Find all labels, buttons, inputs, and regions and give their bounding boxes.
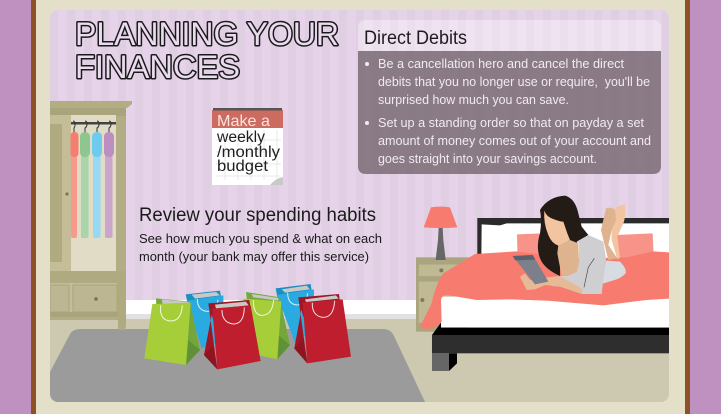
text block: review your spending habits: Review your spending habits <box>139 205 376 226</box>
rug <box>50 329 425 402</box>
neck and chest <box>557 240 579 276</box>
bullet list: goes straight into your savings account. <box>378 151 597 166</box>
hair <box>538 196 588 276</box>
face <box>544 211 570 246</box>
green bag left <box>144 298 200 365</box>
trousers <box>602 261 626 284</box>
calendar: make a weekly/monthly budget: Make a <box>217 113 270 130</box>
text block: review your spending habits: See how much you spend & what on each <box>139 231 382 246</box>
hangers <box>73 121 111 132</box>
duvet <box>421 251 673 329</box>
legs and feet <box>601 204 625 260</box>
red bag left <box>204 300 261 369</box>
bed <box>421 218 673 371</box>
bullet list: Be a cancellation hero and cancel the direct <box>378 56 624 71</box>
calendar: make a weekly/monthly budget <box>212 108 283 185</box>
title <box>75 16 339 85</box>
red bag right <box>294 294 351 363</box>
calendar: make a weekly/monthly budget: /monthly <box>217 144 280 161</box>
arm <box>520 273 582 294</box>
shopping bags <box>144 284 351 369</box>
wallpaper <box>50 10 669 300</box>
wardrobe <box>50 101 132 330</box>
bullet list <box>365 56 651 166</box>
bullet list: Set up a standing order so that on payday a set <box>378 115 644 130</box>
calendar: make a weekly/monthly budget: budget <box>217 158 269 175</box>
title: PLANNING YOUR <box>75 16 339 52</box>
bullet list: surprised how much you can save. <box>378 92 569 107</box>
shirt <box>552 235 606 294</box>
green bag right <box>243 292 290 359</box>
blue bag back right <box>276 284 314 343</box>
skirting board <box>126 300 416 319</box>
bullet list: debits that you no longer use or require, you'll be <box>378 74 650 89</box>
heading: Direct Debits <box>364 28 467 49</box>
lamp <box>424 207 457 260</box>
text block: review your spending habits: month (your bank may offer this service) <box>139 249 369 264</box>
nightstand <box>416 257 472 332</box>
calendar: make a weekly/monthly budget: weekly <box>216 129 265 146</box>
blue bag back left <box>186 291 224 348</box>
woman reading a tablet <box>513 196 626 294</box>
title: FINANCES <box>75 49 240 85</box>
text block: review your spending habits <box>139 205 382 264</box>
floor <box>50 319 669 402</box>
panel: direct debits <box>358 20 661 174</box>
bullet list: amount of money comes out of your account and <box>378 133 651 148</box>
clothes <box>70 132 114 238</box>
tablet <box>513 255 548 284</box>
